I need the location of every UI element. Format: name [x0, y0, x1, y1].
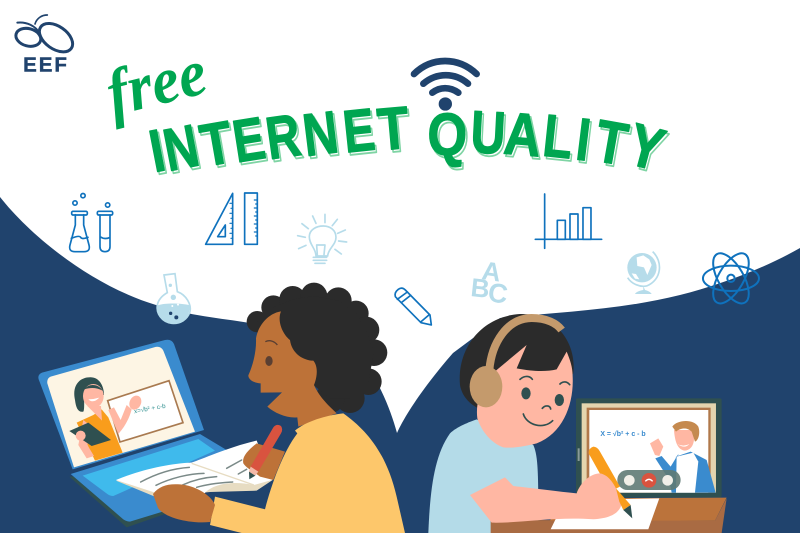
title shadow layer: N: [301, 101, 344, 172]
title main letters: E: [228, 105, 270, 176]
title main letters: A: [502, 100, 544, 169]
title shadow layer: A: [503, 102, 546, 172]
title shadow layer: Q: [429, 103, 470, 171]
title main letters: Q: [427, 101, 468, 168]
title shadow layer: L: [542, 104, 578, 174]
title shadow layer: Y: [623, 113, 673, 186]
title shadow layer: U: [471, 101, 509, 170]
title shadow layer: N: [160, 115, 206, 187]
icon: letters ABC: C: [486, 277, 510, 310]
laptop base shadow: [69, 473, 177, 527]
title shadow layer: E: [342, 99, 380, 169]
navy background wave: [0, 197, 800, 533]
title word: free: free: [99, 36, 214, 131]
shirt: [428, 419, 538, 533]
face and neck: [248, 311, 337, 427]
title main letters: I: [144, 116, 170, 185]
icon: globe: [627, 252, 659, 294]
icon: pencil: [395, 288, 431, 325]
icon: round flask: [157, 274, 190, 324]
icon: letters ABC: B: [469, 272, 491, 304]
icon: atom: [703, 248, 759, 309]
tablet: [576, 398, 722, 497]
title shadow layer: I: [146, 119, 172, 188]
title shadow layer: [146, 97, 673, 188]
title main letters: E: [340, 96, 378, 166]
formula: x=√b² + c-b: [133, 403, 167, 415]
sweater: [210, 413, 405, 533]
pencil upper: [589, 447, 620, 492]
desk: [491, 498, 727, 533]
title main letters: T: [375, 94, 412, 163]
hair: [460, 314, 574, 417]
call controls: [617, 470, 681, 490]
icon: wifi: [414, 61, 477, 111]
title shadow layer: E: [230, 107, 271, 178]
icon: letters ABC: A: [480, 255, 503, 288]
pencil tip: [616, 488, 631, 510]
laptop screen frame: [38, 340, 204, 469]
headphones: [489, 318, 562, 370]
icon: light bulb: [298, 214, 347, 263]
icon: test tubes: [70, 193, 113, 252]
logo wordmark: EEF: [23, 54, 69, 76]
logo butterfly mark: [14, 15, 78, 58]
title main letters: N: [299, 98, 342, 169]
illustration: boy with headphones and tablet: [428, 314, 727, 533]
title main letters: I: [573, 105, 594, 174]
hand with pencil: [243, 443, 285, 480]
title main letters: [144, 94, 671, 185]
boy arm: [470, 473, 622, 523]
title main letters: T: [590, 107, 633, 178]
title main letters: N: [158, 112, 204, 184]
title shadow layer: T: [377, 97, 413, 166]
logo: EEF: [14, 15, 78, 76]
laptop keyboard: [83, 439, 215, 496]
hand on book: [153, 484, 215, 522]
title main letters: U: [469, 98, 507, 167]
title main letters: R: [262, 102, 305, 173]
hair: [247, 283, 387, 413]
title: INTERNET QUALITY: [144, 94, 673, 188]
laptop screen: [47, 347, 195, 467]
icon: letters ABC: [469, 255, 510, 310]
paper: [551, 498, 659, 529]
title shadow layer: R: [264, 104, 306, 175]
open book: [116, 441, 273, 497]
tablet teacher: [650, 421, 716, 493]
icon: set square and ruler: [206, 193, 257, 244]
title main letters: T: [195, 108, 238, 179]
tablet formula: X = √b² + c - b: [600, 430, 646, 438]
illustration: laptop with teacher: [38, 340, 273, 527]
laptop base: [71, 434, 227, 522]
title main letters: L: [540, 102, 576, 172]
eye and brow: [265, 356, 273, 366]
title shadow layer: I: [575, 108, 596, 177]
title main letters: Y: [621, 111, 671, 184]
face: [477, 345, 573, 448]
icon: bar chart: [535, 194, 602, 248]
illustration: girl writing: [210, 283, 405, 533]
title shadow layer: T: [592, 110, 634, 181]
whiteboard: [108, 381, 183, 442]
teacher: [69, 377, 144, 461]
boy face features: [520, 376, 570, 426]
title shadow layer: T: [197, 111, 239, 182]
